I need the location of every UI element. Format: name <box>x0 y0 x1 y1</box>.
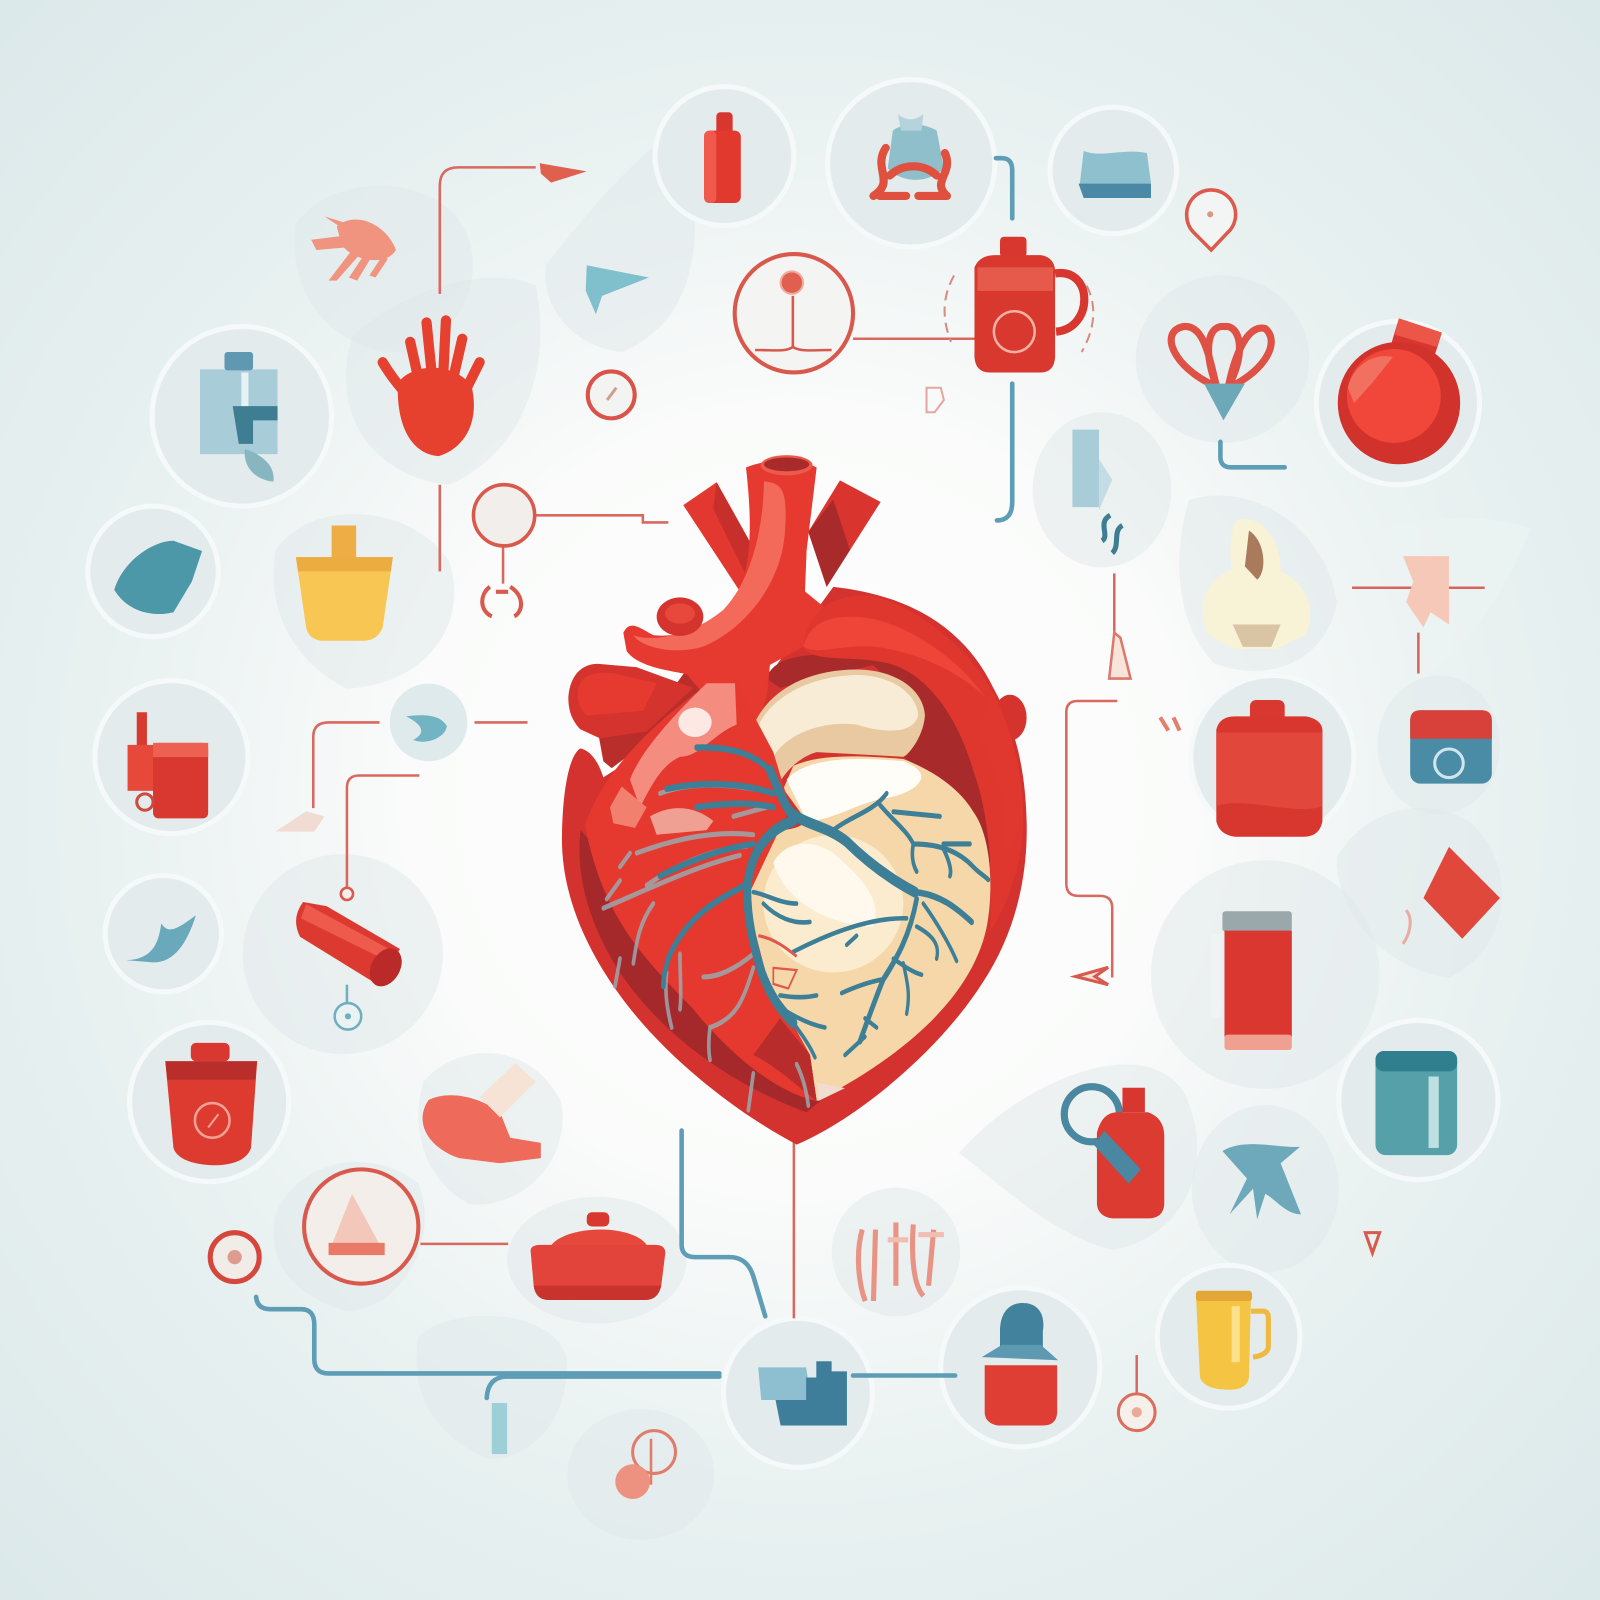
blue veins <box>660 747 988 1057</box>
outlined icon discs <box>88 80 1498 1467</box>
blue connector lines <box>256 158 1285 1398</box>
icon: paw small top left <box>311 216 396 281</box>
icon: red jar <box>165 1043 257 1165</box>
icon: pale peach tag <box>1403 556 1449 628</box>
icon: coral drop ring <box>615 1431 676 1499</box>
icon: coral blob hand <box>423 1063 541 1163</box>
icon: small pin ring top right <box>1187 190 1236 250</box>
right chamber <box>747 756 990 1101</box>
icon: wedge ring <box>304 1169 418 1284</box>
icon: red ball <box>1338 318 1460 464</box>
cream upper tube <box>748 670 925 782</box>
icon: red cylinder <box>296 888 408 992</box>
heart dark inner band <box>579 830 820 1112</box>
arch <box>803 595 1027 931</box>
icon: bottom ring pin <box>1118 1394 1155 1431</box>
icon: yellow mug <box>1196 1291 1268 1390</box>
aorta <box>623 455 833 734</box>
red connector lines <box>313 167 1485 1396</box>
icon: blue box bottom <box>758 1361 847 1425</box>
branch vessels <box>683 480 881 591</box>
heart shell <box>562 587 1027 1145</box>
icon: small ring with mark <box>588 371 635 418</box>
icon: pale teal bar <box>492 1403 507 1454</box>
left chamber <box>585 683 817 1101</box>
icon: red flower funnel <box>1171 326 1271 420</box>
icon: cream robe figure <box>1203 519 1310 649</box>
icon: clock ring <box>735 254 853 372</box>
icon: teal bird <box>127 915 196 962</box>
icon: red bottle <box>704 112 741 203</box>
soft background blobs <box>243 133 1531 1540</box>
left pipe <box>568 664 707 768</box>
red capillary mark <box>758 936 797 989</box>
icon: teal ring pin <box>335 985 361 1030</box>
icon: tiny glyph centre <box>927 388 944 412</box>
icon: tiny red mark right <box>1160 717 1180 731</box>
icon: red casserole pot <box>531 1212 665 1300</box>
gray faded left veins <box>603 785 808 1110</box>
icon: arrow mid right <box>1076 967 1108 985</box>
icon: blue fish <box>1222 1144 1301 1219</box>
icon: teal pouch <box>114 541 202 614</box>
icon: tiny pin right <box>1365 1233 1380 1253</box>
icon: pale arrow foot <box>276 811 324 832</box>
icon: red can with tube <box>1211 911 1292 1050</box>
dark interior behind arch <box>767 654 990 867</box>
icon: ring with line mid left <box>473 485 535 546</box>
icon: red mug <box>945 237 1093 372</box>
icon: red double cup <box>128 712 208 818</box>
icon: yellow basket <box>296 526 393 641</box>
icon: red hand <box>383 320 480 456</box>
icon: coral tag <box>1403 847 1500 944</box>
icon: teal paper plane <box>586 265 649 314</box>
icon: red jerry jar <box>1216 700 1322 837</box>
icon: teal swoosh <box>406 715 447 742</box>
heart <box>562 455 1027 1145</box>
icon: blue strip tool <box>1072 430 1122 553</box>
icon: red key bottle <box>1064 1087 1164 1218</box>
icon: small anchor <box>482 587 521 616</box>
icon: frog figure <box>873 114 947 196</box>
icon: teal cup <box>1375 1051 1457 1155</box>
icon: red and blue shaker <box>982 1303 1058 1425</box>
icon: target ring <box>210 1233 259 1282</box>
icon: camera box <box>1410 710 1492 784</box>
icon: blue medicine bottle <box>200 352 278 482</box>
icon: blue block <box>1079 151 1151 198</box>
icon: red pin bottom <box>1109 633 1131 679</box>
icon: arrow top left <box>540 163 587 183</box>
apex tip <box>817 1083 845 1101</box>
icon: people group <box>858 1222 944 1301</box>
